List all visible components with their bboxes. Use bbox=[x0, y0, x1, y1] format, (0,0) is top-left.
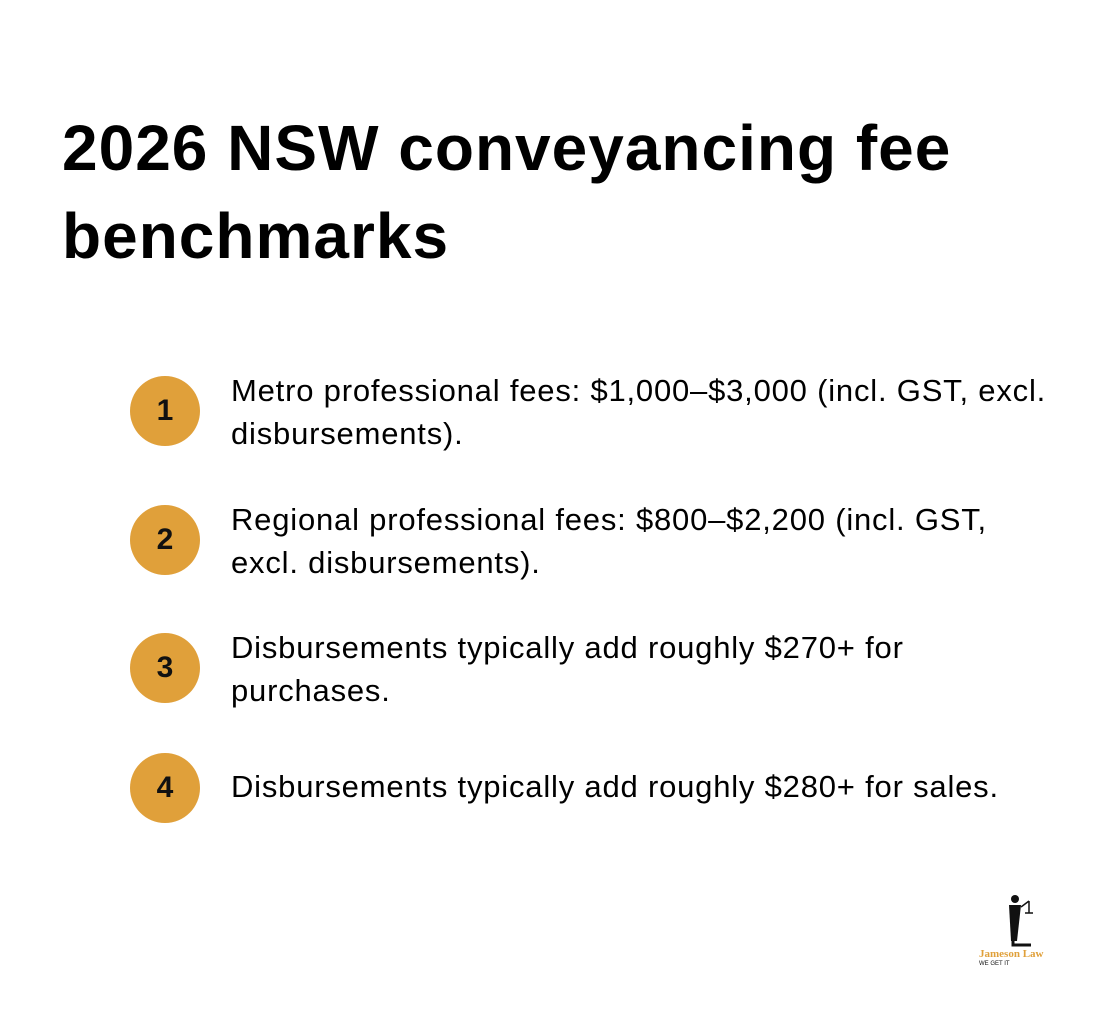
circle 2: 2 bbox=[157, 523, 173, 556]
circle 3 bbox=[130, 633, 200, 703]
circle 1: 1 bbox=[157, 394, 173, 427]
logo: WE GET IT bbox=[979, 961, 1010, 967]
title: benchmarks bbox=[62, 200, 449, 272]
text 3 bbox=[231, 630, 904, 708]
text 2 bbox=[231, 502, 987, 580]
text 1: disbursements). bbox=[231, 416, 464, 451]
circle 4: 4 bbox=[157, 771, 173, 804]
item 1 bbox=[130, 373, 1046, 451]
circle 4 bbox=[130, 753, 200, 823]
circle 3: 3 bbox=[157, 651, 173, 684]
logo text: Jameson Law bbox=[979, 948, 1043, 960]
text 3: purchases. bbox=[231, 673, 391, 708]
item 2 bbox=[130, 502, 987, 580]
title: 2026 NSW conveyancing fee bbox=[62, 112, 951, 184]
text 2: Regional professional fees: $800–$2,200 (incl. GST, bbox=[231, 502, 987, 537]
text 1 bbox=[231, 373, 1046, 451]
item 3 bbox=[130, 630, 904, 708]
circle 2 bbox=[130, 505, 200, 575]
text 2: excl. disbursements). bbox=[231, 545, 541, 580]
text 4: Disbursements typically add roughly $280+ for sales. bbox=[231, 769, 999, 804]
title bbox=[62, 112, 951, 272]
item 4 bbox=[130, 753, 999, 823]
icon: lady justice bbox=[1009, 895, 1033, 946]
text 1: Metro professional fees: $1,000–$3,000 (incl. GST, excl. bbox=[231, 373, 1046, 408]
circle 1 bbox=[130, 376, 200, 446]
text 3: Disbursements typically add roughly $270+ for bbox=[231, 630, 904, 665]
logo bbox=[979, 895, 1044, 967]
